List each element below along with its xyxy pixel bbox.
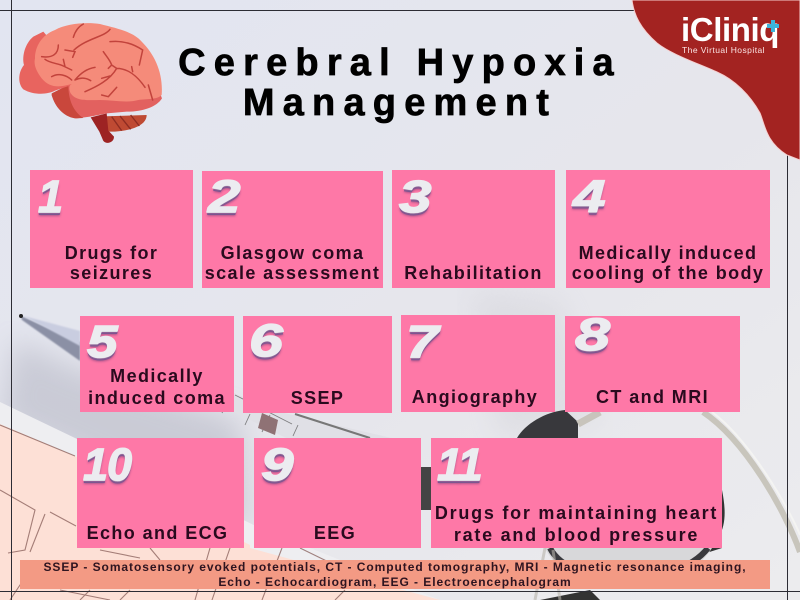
card 1: 1	[38, 171, 62, 222]
card 2	[202, 171, 383, 288]
legend: abbreviations: SSEP - Somatosensory evoked potentials, CT - Computed tomography, MRI - Magnetic resonance imaging,	[43, 560, 747, 574]
card 10	[77, 438, 244, 548]
card 4: Medically induced	[579, 243, 757, 263]
sulci	[42, 24, 153, 100]
card 3: Rehabilitation	[404, 263, 543, 283]
main lobe	[35, 23, 162, 101]
card 9: EEG	[314, 523, 356, 543]
card 6: SSEP	[291, 388, 344, 408]
card 7	[401, 315, 555, 412]
under lobe	[52, 83, 162, 118]
card 6	[243, 316, 392, 413]
title: Cerebral Hypoxia	[178, 42, 622, 84]
card 10: Echo and ECG	[87, 523, 228, 543]
card 7: Angiography	[412, 387, 538, 407]
card 4	[566, 170, 770, 288]
card 8: 8	[575, 309, 609, 360]
card 3	[392, 170, 555, 288]
card 6: 6	[249, 315, 281, 366]
icon: brain	[19, 23, 162, 143]
legend: abbreviations: Echo - Echocardiogram, EEG - Electroencephalogram	[218, 575, 572, 589]
card 1	[30, 170, 193, 288]
brainstem	[91, 113, 114, 143]
card 8	[565, 316, 740, 412]
card 4: cooling of the body	[572, 263, 764, 283]
cerebellum	[93, 115, 147, 132]
card 2: scale assessment	[205, 263, 380, 283]
card 2: 2	[208, 171, 239, 222]
card 11: Drugs for maintaining heart	[435, 503, 718, 523]
card 1: seizures	[70, 263, 153, 283]
legend: abbreviations	[20, 560, 770, 589]
logo: iCliniq: The Virtual Hospital	[682, 45, 765, 55]
left lobe	[19, 32, 72, 94]
card 5: Medically	[110, 366, 204, 386]
card 11: rate and blood pressure	[454, 525, 699, 545]
logo: iCliniq: iCliniq	[681, 11, 779, 48]
icon: plus	[767, 20, 779, 32]
card 2: Glasgow coma	[221, 243, 364, 263]
card 8: CT and MRI	[596, 387, 709, 407]
card 4: 4	[573, 171, 604, 222]
card 1: Drugs for	[65, 243, 158, 263]
card 5	[80, 316, 234, 412]
card 11	[431, 438, 722, 548]
card 9	[254, 438, 421, 548]
card 7: 7	[406, 316, 437, 367]
card 11: 11	[437, 439, 482, 490]
card 5: 5	[87, 316, 116, 367]
card 10: 10	[83, 439, 131, 490]
card 3: 3	[399, 171, 430, 222]
title	[178, 42, 622, 124]
title: Management	[243, 82, 557, 124]
card 5: induced coma	[88, 388, 226, 408]
card 9: 9	[261, 439, 292, 490]
